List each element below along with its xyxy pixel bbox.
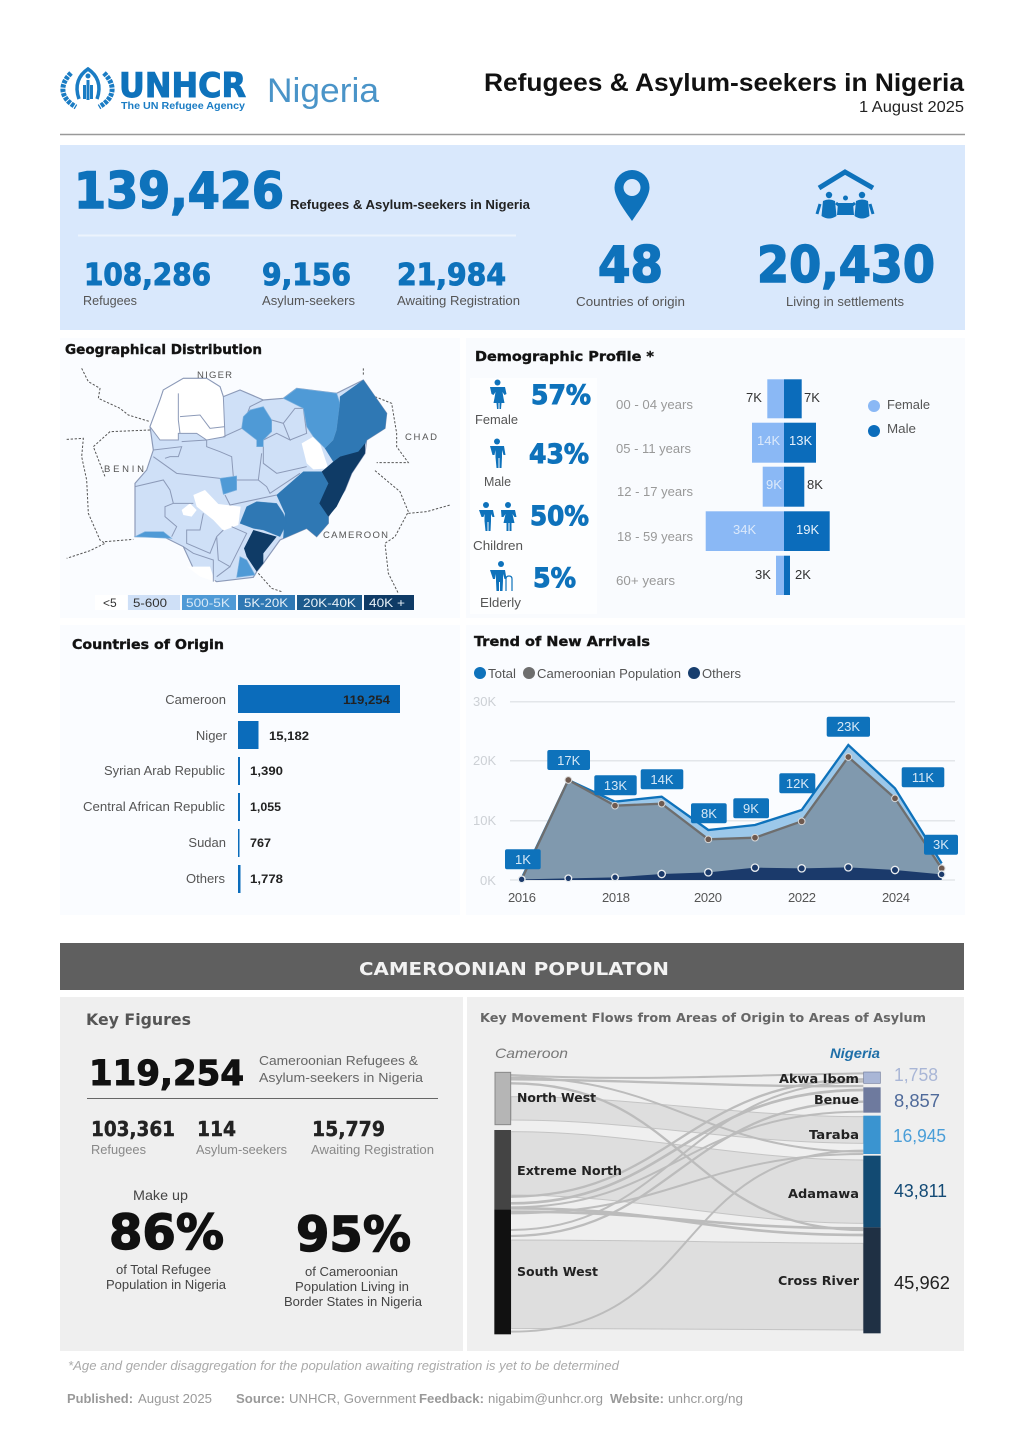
x axis labels: 2022 <box>788 890 816 905</box>
y axis labels and grid <box>473 694 955 888</box>
population pyramid: 3K <box>755 567 771 582</box>
data labels: 11K <box>912 770 934 785</box>
children share <box>473 501 589 553</box>
country base <box>135 378 387 582</box>
asylum values <box>893 1065 950 1293</box>
asylum labels: Taraba <box>809 1128 859 1142</box>
neighbouring country labels <box>104 370 437 541</box>
children share: 50% <box>530 501 589 532</box>
column headers: Nigeria <box>830 1045 880 1061</box>
95 percent stat: of Cameroonian <box>305 1264 398 1279</box>
population pyramid <box>706 379 830 595</box>
pyramid legend <box>868 397 930 437</box>
bar chart: Others <box>186 871 225 886</box>
states 5K-20K <box>240 380 387 538</box>
origin nodes <box>494 1072 511 1334</box>
icon: UNHCR laurel and shelter emblem <box>63 69 112 107</box>
neighbouring country labels: CHAD <box>405 432 437 443</box>
age labels: 12 - 17 years <box>617 485 693 499</box>
breakdown figures: 114 <box>197 1117 236 1141</box>
chart legend: Others <box>702 666 741 681</box>
origin labels <box>517 1091 622 1279</box>
95 percent stat: Border States in Nigeria <box>284 1294 423 1309</box>
pyramid legend: Female <box>887 397 930 412</box>
bar chart: Syrian Arab Republic <box>104 763 225 778</box>
children share: Children <box>473 538 523 553</box>
countries of origin: 48 <box>598 236 663 294</box>
breakdown figures <box>91 1117 434 1157</box>
x axis labels: 2024 <box>882 890 910 905</box>
sankey diagram <box>494 1072 881 1334</box>
awaiting registration: 21,984 <box>397 258 506 293</box>
female share: Female <box>475 412 518 427</box>
area chart <box>518 745 945 883</box>
panel: trend of new arrivals <box>466 625 965 915</box>
state boundaries <box>135 393 307 582</box>
data labels: 17K <box>557 753 581 768</box>
title <box>484 69 965 116</box>
total caption: Asylum-seekers in Nigeria <box>259 1070 424 1085</box>
states 40K+ <box>244 443 365 572</box>
asylum values: 1,758 <box>894 1065 938 1085</box>
footer credits: Published: <box>67 1391 133 1406</box>
breakdown figures: Refugees <box>91 1142 146 1157</box>
heading: Trend of New Arrivals <box>474 634 650 650</box>
total caption: Cameroonian Refugees & <box>259 1053 418 1068</box>
origin labels: South West <box>517 1265 598 1279</box>
population pyramid: 9K <box>766 477 782 492</box>
neighbouring country labels: BENIN <box>104 464 144 475</box>
bar chart: 15,182 <box>269 729 309 743</box>
states 500-5K <box>135 388 340 577</box>
population pyramid: 14K <box>757 433 780 448</box>
icon: location pin <box>614 170 650 221</box>
data labels: 14K <box>650 772 674 787</box>
date: 1 August 2025 <box>859 99 964 116</box>
total caption: Refugees & Asylum-seekers in Nigeria <box>290 197 531 212</box>
data labels: 23K <box>837 719 860 734</box>
bar chart: 767 <box>250 836 271 850</box>
country name: Nigeria <box>267 72 379 110</box>
refugees: 108,286 <box>84 258 211 293</box>
data labels: 13K <box>604 778 627 793</box>
panel: countries of origin <box>60 625 460 915</box>
bar chart: Cameroon <box>165 692 226 707</box>
footer credits: UNHCR, Government <box>289 1391 416 1406</box>
section banner: Cameroonian population: CAMEROONIAN POPULATON <box>359 959 669 980</box>
asylum labels <box>778 1072 859 1288</box>
male share: Male <box>484 474 511 489</box>
asylum labels: Cross River <box>778 1274 859 1288</box>
chart legend: Total <box>488 666 516 681</box>
panel: demographic profile <box>466 338 965 618</box>
bar chart: Central African Republic <box>83 799 225 814</box>
title: Refugees & Asylum-seekers in Nigeria <box>484 69 965 97</box>
footer credits: Source: <box>236 1391 285 1406</box>
map legend: 20K-40K <box>303 596 356 610</box>
95 percent stat: Population Living in <box>295 1279 409 1294</box>
data labels: 8K <box>701 806 717 821</box>
chart legend <box>474 666 741 681</box>
female share: 57% <box>531 380 591 411</box>
map legend: <5 <box>103 596 117 610</box>
panel: geographical distribution <box>60 338 460 618</box>
countries of origin: Countries of origin <box>576 294 685 309</box>
bar chart: 1,778 <box>250 872 283 886</box>
86 percent stat: of Total Refugee <box>116 1262 211 1277</box>
population pyramid: 7K <box>746 390 762 405</box>
origin labels: North West <box>517 1091 596 1105</box>
data labels: 1K <box>515 852 531 867</box>
footer credits: Feedback: <box>419 1391 484 1406</box>
data labels <box>505 717 958 869</box>
icon: male <box>490 438 506 468</box>
y axis labels and grid: 10K <box>473 813 496 828</box>
x axis labels: 2020 <box>694 890 722 905</box>
origin labels: Extreme North <box>517 1164 622 1178</box>
refugees: Refugees <box>83 293 137 308</box>
wordmark: UNHCR <box>119 66 246 106</box>
x axis labels: 2018 <box>602 890 630 905</box>
panel: key figures <box>60 145 965 330</box>
icon: family under roof <box>817 172 873 218</box>
column headers: Cameroon <box>495 1045 568 1061</box>
tagline: The UN Refugee Agency <box>121 100 245 112</box>
bar chart: 1,390 <box>250 764 283 778</box>
panel: key figures for Cameroonians <box>60 997 463 1351</box>
total population: 139,426 <box>74 162 284 220</box>
icon: female <box>490 380 506 409</box>
chart legend: Cameroonian Population <box>537 666 681 681</box>
data labels: 12K <box>786 776 809 791</box>
total caption <box>259 1053 424 1085</box>
map legend: 500-5K <box>186 596 230 610</box>
female share <box>475 380 591 427</box>
footer credits: nigabim@unhcr.org <box>488 1391 603 1406</box>
living in settlements: Living in settlements <box>786 294 905 309</box>
asylum labels: Adamawa <box>788 1187 859 1201</box>
map legend: 5-600 <box>133 596 167 610</box>
bar chart: 119,254 <box>343 693 390 707</box>
countries of origin <box>576 236 685 309</box>
population pyramid: 13K <box>789 433 812 448</box>
heading: Demographic Profile * <box>475 349 654 365</box>
y axis labels and grid: 30K <box>473 694 496 709</box>
awaiting registration: Awaiting Registration <box>397 293 520 308</box>
bar chart <box>83 685 400 893</box>
make up label: Make up <box>133 1187 188 1203</box>
bar chart: Niger <box>196 728 228 743</box>
95 percent stat <box>284 1207 423 1309</box>
age labels: 60+ years <box>616 574 675 588</box>
breakdown figures: 15,779 <box>312 1117 385 1141</box>
data labels: 9K <box>743 801 759 816</box>
pyramid legend: Male <box>887 421 916 436</box>
breakdown figures: Asylum-seekers <box>196 1142 287 1157</box>
footer credits: Website: <box>610 1391 664 1406</box>
male share: 43% <box>529 439 589 470</box>
population pyramid: 8K <box>807 477 823 492</box>
map legend <box>95 595 414 610</box>
panel: movement flows <box>467 997 964 1351</box>
asylum labels: Benue <box>814 1093 859 1107</box>
header: UNHCR logo <box>63 66 379 112</box>
x axis labels <box>508 890 910 905</box>
95 percent stat: 95% <box>296 1207 411 1263</box>
breakdown figures: Awaiting Registration <box>311 1142 434 1157</box>
icon: elderly <box>490 561 512 591</box>
living in settlements: 20,430 <box>757 236 935 294</box>
elderly share: 5% <box>533 563 576 594</box>
section banner: Cameroonian population <box>60 943 964 990</box>
asylum values: 16,945 <box>893 1126 946 1146</box>
x axis labels: 2016 <box>508 890 536 905</box>
footer credits: August 2025 <box>138 1391 212 1406</box>
male share <box>484 439 589 489</box>
column headers <box>495 1045 880 1061</box>
population pyramid: 2K <box>795 567 811 582</box>
asylum-seekers: 9,156 <box>262 258 351 293</box>
neighbouring country labels: CAMEROON <box>323 530 388 541</box>
heading: Countries of Origin <box>72 637 224 653</box>
heading: Key Figures <box>86 1010 191 1029</box>
total Cameroonian: 119,254 <box>89 1054 244 1094</box>
breakdown figures: 103,361 <box>91 1117 175 1141</box>
asylum labels: Akwa Ibom <box>779 1072 859 1086</box>
heading: Key Movement Flows from Areas of Origin to Areas of Asylum <box>480 1010 926 1025</box>
awaiting registration <box>397 258 520 308</box>
refugees <box>83 258 211 308</box>
age labels <box>616 398 693 588</box>
footer credits <box>67 1391 743 1406</box>
map legend: 40K + <box>369 596 405 610</box>
elderly share: Elderly <box>480 595 522 610</box>
population pyramid: 34K <box>733 522 756 537</box>
data labels: 3K <box>933 837 949 852</box>
asylum values: 43,811 <box>894 1181 947 1201</box>
age labels: 00 - 04 years <box>616 398 693 412</box>
asylum values: 8,857 <box>894 1091 940 1111</box>
86 percent stat: Population in Nigeria <box>106 1277 227 1292</box>
population pyramid: 7K <box>804 390 820 405</box>
bar chart: Sudan <box>188 835 226 850</box>
86 percent stat <box>106 1205 227 1292</box>
y axis labels and grid: 20K <box>473 753 496 768</box>
elderly share <box>480 563 576 610</box>
age labels: 18 - 59 years <box>617 530 693 544</box>
map of Nigeria <box>67 368 450 593</box>
86 percent stat: 86% <box>109 1205 224 1261</box>
population pyramid: 19K <box>796 522 819 537</box>
y axis labels and grid: 0K <box>480 873 496 888</box>
icon: children <box>479 502 516 531</box>
heading: Geographical Distribution <box>65 342 262 358</box>
footnote: *Age and gender disaggregation for the population awaiting registration is yet to be determined <box>68 1358 620 1373</box>
footer credits: unhcr.org/ng <box>668 1391 743 1406</box>
age labels: 05 - 11 years <box>616 442 691 456</box>
asylum nodes <box>863 1072 881 1333</box>
asylum-seekers <box>262 258 356 308</box>
map legend: 5K-20K <box>244 596 288 610</box>
asylum values: 45,962 <box>894 1273 950 1293</box>
asylum-seekers: Asylum-seekers <box>262 293 356 308</box>
neighbouring country labels: NIGER <box>197 370 232 381</box>
bar chart: 1,055 <box>250 800 281 814</box>
states with fewer than 5 <box>150 378 328 582</box>
